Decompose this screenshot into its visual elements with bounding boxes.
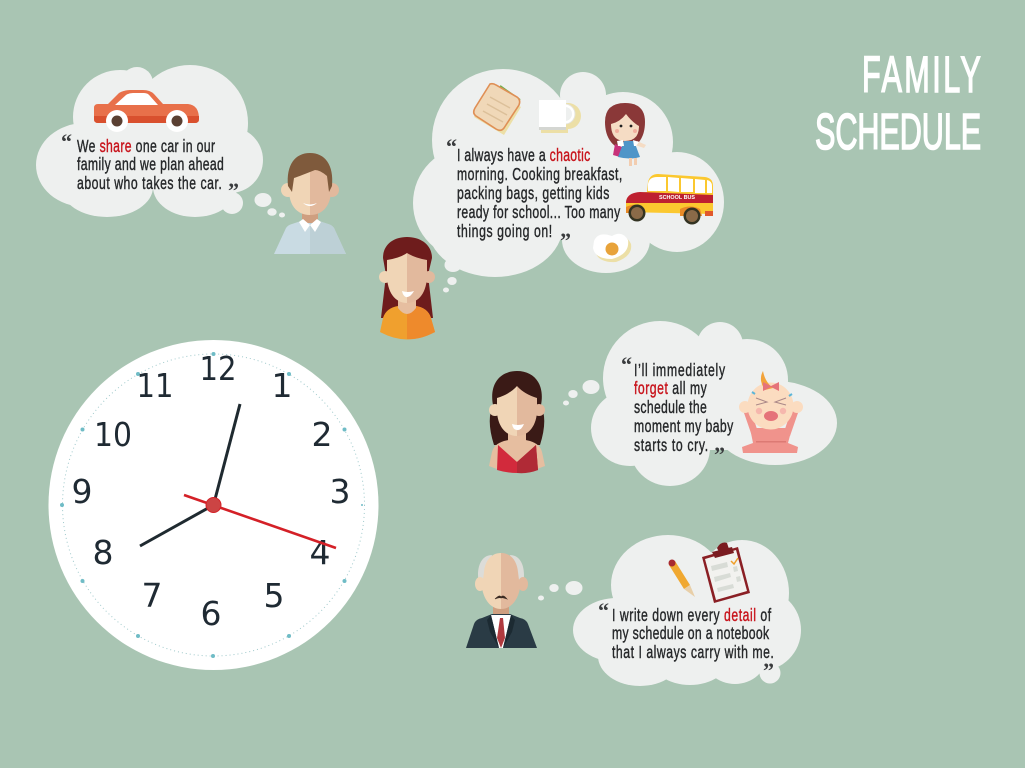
quote text: car: “ [61,129,72,154]
quote text: notebook: ” [763,658,774,683]
quote text: notebook: that I always carry with me. [612,643,774,663]
person: man [274,153,346,254]
thought cloud: baby [563,321,837,486]
icon: school girl [605,103,646,166]
clock numerals: 1 [272,366,292,405]
quote text: baby: ” [714,442,725,467]
title: SCHEDULE [815,103,981,160]
clock numerals: 12 [200,349,236,388]
clock hub [206,498,221,512]
clock numerals: 3 [330,472,350,511]
hour tick dots [60,352,363,658]
clock numerals: 4 [310,533,330,572]
quote text: morning: “ [446,134,457,159]
clock numerals: 10 [94,415,132,454]
icon: school bus [626,174,713,224]
person: old man [466,553,537,648]
clock numerals: 5 [264,576,284,615]
icon: clipboard [702,543,750,603]
quote text: car: ” [228,178,239,203]
clock numerals: 11 [136,366,174,405]
clock face [48,340,378,670]
icon: crying baby [739,371,803,453]
quote text: morning: ” [560,228,571,253]
quote text: baby: forget all my [634,379,707,399]
thought cloud: notebook [538,535,801,686]
quote text: car [61,129,239,203]
quote text: baby: I’ll immediately [634,361,725,381]
quote text: morning: morning. Cooking breakfast, [457,165,622,185]
clock numerals: 7 [142,576,162,615]
hour hand [140,505,214,546]
clock numerals: 9 [72,472,92,511]
title [815,46,981,160]
quote text: notebook: my schedule on a notebook [612,624,769,644]
quote text: car: about who takes the car. [77,174,222,194]
clock numerals [72,349,350,633]
quote text: baby: “ [621,352,632,377]
clock numerals: 2 [312,415,332,454]
title: FAMILY [862,46,981,103]
icon: pencil [668,560,695,597]
panel: car thought [36,65,346,254]
quote text: car: family and we plan ahead [77,155,224,175]
quote text: baby: moment my baby [634,417,734,437]
quote text: notebook: “ [598,598,609,623]
icon: sandwich [474,84,521,135]
panel: baby thought [489,321,837,486]
icon: coffee cup [539,100,581,133]
quote text: baby [621,352,734,467]
icon: car [94,90,199,132]
thought cloud: car [36,65,285,218]
quote text: car: We share one car in our [77,137,215,157]
quote text: morning: packing bags, getting kids [457,184,610,204]
clock numerals: 8 [92,533,114,572]
thought cloud: morning [413,69,724,292]
quote text: morning: things going on! [457,222,552,242]
quote text: morning: I always have a chaotic [457,146,591,166]
clock [48,340,378,670]
second hand [184,495,336,548]
quote text: morning [446,134,622,253]
clock numerals: 6 [200,594,222,633]
panel: chaotic morning thought [379,69,724,340]
person: woman in red [489,371,545,473]
quote text: notebook: I write down every detail of [612,606,772,626]
quote text: baby: starts to cry. [634,436,708,456]
person: woman in orange [379,237,435,340]
icon: school bus: SCHOOL BUS [659,195,696,201]
quote text: morning: ready for school... Too many [457,203,620,223]
icon: fried egg [593,234,631,262]
quote text: baby: schedule the [634,398,707,418]
minute hand [214,404,240,505]
quote text: notebook [598,598,774,683]
panel: notebook thought [466,535,801,686]
